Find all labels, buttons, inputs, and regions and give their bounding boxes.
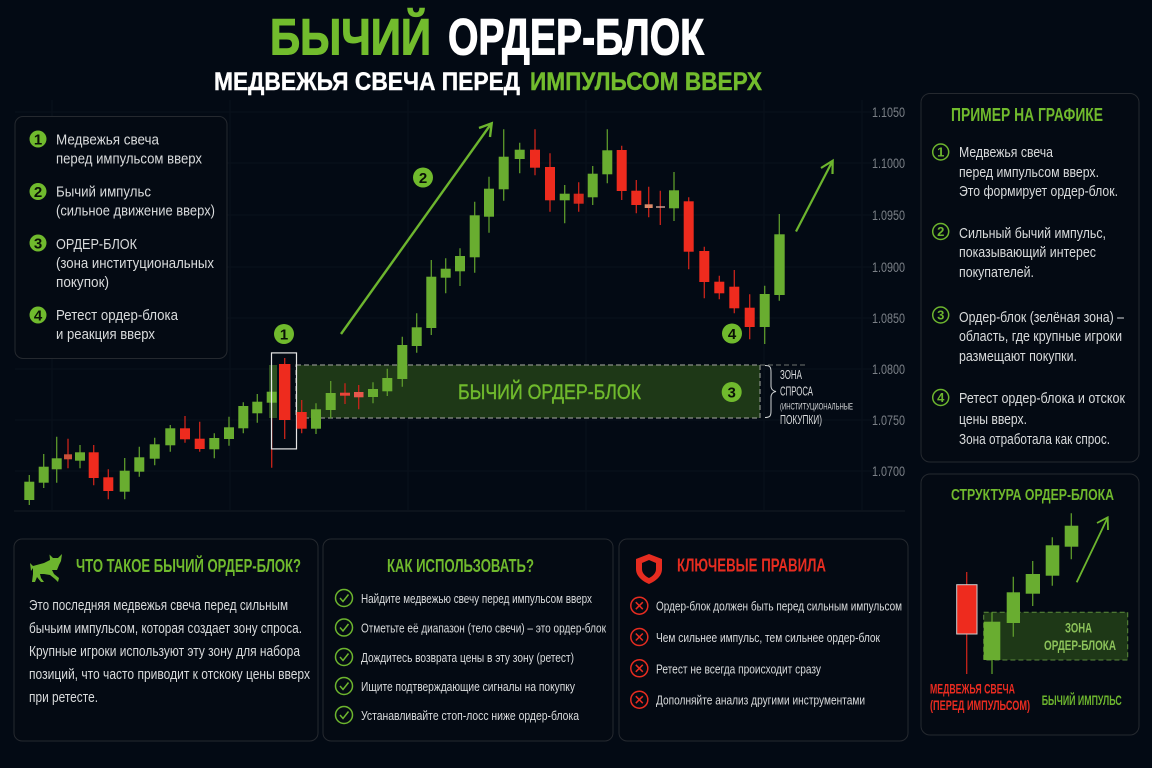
candlestick chart xyxy=(24,129,785,505)
price axis: 1.0900 xyxy=(872,259,905,275)
panel: how to use xyxy=(323,539,613,741)
checklist item 2 xyxy=(336,619,606,636)
checklist item 4 xyxy=(336,678,575,694)
price axis: 1.0750 xyxy=(872,412,905,428)
checklist item 1 xyxy=(336,590,592,606)
description: Это последняя медвежья свеча перед сильным xyxy=(29,597,288,614)
price axis: 1.0850 xyxy=(872,310,905,326)
checklist item 5 xyxy=(336,706,580,724)
checklist item 5: Устанавливайте стоп-лосс ниже ордер-блока xyxy=(361,708,580,723)
step 4: цены вверх. xyxy=(959,411,1027,428)
step 2: Сильный бычий импульс, xyxy=(959,225,1106,242)
step 1: Это формирует ордер-блок. xyxy=(959,183,1118,200)
panel: key rules xyxy=(619,539,908,741)
bearish caption: (ПЕРЕД ИМПУЛЬСОМ) xyxy=(930,697,1030,713)
demand zone note: ПОКУПКИ) xyxy=(780,412,822,427)
rule 2 xyxy=(631,628,880,646)
step 4 xyxy=(933,390,1125,448)
legend item 2: Бычий импульс xyxy=(56,184,151,200)
zone label xyxy=(1044,619,1116,653)
legend item 3: (зона институциональных xyxy=(56,255,214,272)
description: позиций, что часто приводит к отскоку цены вверх xyxy=(29,666,310,683)
legend item 3: покупок) xyxy=(56,274,109,291)
step 3: 3 xyxy=(937,308,944,323)
demand zone note: (ИНСТИТУЦИОНАЛЬНЫЕ xyxy=(780,402,853,412)
structure candles xyxy=(957,513,1078,674)
zone label: БЫЧИЙ ОРДЕР-БЛОК xyxy=(458,380,642,404)
legend item 1 xyxy=(30,130,202,168)
price axis: 1.0950 xyxy=(872,207,905,223)
panel: example on chart xyxy=(921,94,1139,462)
bearish caption xyxy=(930,680,1030,713)
marker 1: 1 xyxy=(280,326,288,344)
legend item 4: Ретест ордер-блока xyxy=(56,307,179,324)
price axis xyxy=(872,104,905,479)
price axis: 1.1050 xyxy=(872,104,905,120)
heading: ПРИМЕР НА ГРАФИКЕ xyxy=(951,105,1103,125)
zone rectangle xyxy=(984,612,1128,660)
bearish order block candle xyxy=(272,353,296,449)
heading: КЛЮЧЕВЫЕ ПРАВИЛА xyxy=(677,556,826,576)
marker 4 xyxy=(722,324,742,344)
step 1 xyxy=(933,144,1118,200)
heading: КАК ИСПОЛЬЗОВАТЬ? xyxy=(387,556,534,576)
rule 2: Чем сильнее импульс, тем сильнее ордер-блок xyxy=(656,630,880,645)
step 4: Зона отработала как спрос. xyxy=(959,431,1110,448)
demand zone note: ЗОНА xyxy=(780,367,802,382)
icon: bull xyxy=(30,554,62,582)
price axis: 1.0700 xyxy=(872,463,905,479)
legend item 4 xyxy=(30,306,179,343)
legend item 1: Медвежья свеча xyxy=(56,132,160,148)
step 2: 2 xyxy=(937,224,944,239)
legend item 1: 1 xyxy=(34,132,42,148)
rule 1: Ордер-блок должен быть перед сильным импульсом xyxy=(656,598,902,614)
bearish caption: МЕДВЕЖЬЯ СВЕЧА xyxy=(930,680,1015,696)
step 1: 1 xyxy=(937,145,944,160)
step 1: перед импульсом вверх. xyxy=(959,164,1099,181)
order block zone xyxy=(296,365,808,418)
arrow: impulse xyxy=(341,123,492,334)
legend item 1: перед импульсом вверх xyxy=(56,150,202,168)
marker 1 xyxy=(274,324,294,344)
step 3: область, где крупные игроки xyxy=(959,328,1122,345)
checklist item 2: Отметьте её диапазон (тело свечи) – это ордер-блок xyxy=(361,620,606,636)
step 1: Медвежья свеча xyxy=(959,144,1054,161)
title xyxy=(270,8,705,66)
step 3: размещают покупки. xyxy=(959,348,1077,365)
marker 4: 4 xyxy=(728,326,737,343)
legend item 4: 4 xyxy=(34,308,43,324)
demand zone note: СПРОСА xyxy=(780,384,813,398)
zone label: ОРДЕР-БЛОКА xyxy=(1044,637,1116,653)
title: БЫЧИЙ xyxy=(270,8,431,66)
legend item 2: 2 xyxy=(34,184,42,201)
icon: shield xyxy=(636,554,662,584)
title: ОРДЕР-БЛОК xyxy=(448,8,705,66)
step 3 xyxy=(933,307,1125,365)
legend item 2 xyxy=(30,183,215,220)
step 4: 4 xyxy=(937,390,945,405)
legend item 4: и реакция вверх xyxy=(56,326,155,343)
marker 3: 3 xyxy=(728,384,736,402)
description: Крупные игроки используют эту зону для набора xyxy=(29,643,301,660)
description: при ретесте. xyxy=(29,689,98,706)
legend item 2: (сильное движение вверх) xyxy=(56,202,215,220)
price axis: 1.0800 xyxy=(872,361,905,377)
checklist item 3: Дождитесь возврата цены в эту зону (ретест) xyxy=(361,650,574,665)
step 2 xyxy=(933,224,1106,281)
checklist item 1: Найдите медвежью свечу перед импульсом вверх xyxy=(361,591,592,606)
marker 2: 2 xyxy=(419,170,427,187)
description: бычьим импульсом, которая создает зону спроса. xyxy=(29,620,302,637)
description xyxy=(29,597,310,706)
legend item 3 xyxy=(30,234,214,291)
rule 4: Дополняйте анализ другими инструментами xyxy=(656,692,865,708)
demand zone note xyxy=(765,366,853,427)
step 2: покупателей. xyxy=(959,264,1034,281)
rule 1 xyxy=(631,597,902,614)
rule 3 xyxy=(631,660,821,677)
heading: ЧТО ТАКОЕ БЫЧИЙ ОРДЕР-БЛОК? xyxy=(76,555,301,576)
checklist item 3 xyxy=(336,648,574,666)
panel: what is bullish order block xyxy=(14,539,318,741)
step 2: показывающий интерес xyxy=(959,244,1096,261)
legend item 3: 3 xyxy=(34,236,42,252)
subtitle: МЕДВЕЖЬЯ СВЕЧА ПЕРЕД xyxy=(214,68,520,96)
checklist item 4: Ищите подтверждающие сигналы на покупку xyxy=(361,679,575,694)
legend item 3: ОРДЕР-БЛОК xyxy=(56,236,137,253)
panel: order block structure xyxy=(921,474,1139,735)
subtitle: ИМПУЛЬСОМ ВВЕРХ xyxy=(530,68,762,96)
rule 4 xyxy=(631,691,865,708)
zone label: ЗОНА xyxy=(1065,619,1092,635)
arrow: rebound xyxy=(796,161,833,232)
structure arrow xyxy=(1077,517,1108,582)
rule 3: Ретест не всегда происходит сразу xyxy=(656,661,821,676)
marker 3 xyxy=(722,382,742,402)
step 4: Ретест ордер-блока и отскок xyxy=(959,390,1125,407)
panel: legend xyxy=(15,116,227,358)
subtitle xyxy=(214,68,762,96)
price axis: 1.1000 xyxy=(872,155,905,171)
marker 2 xyxy=(413,168,433,188)
